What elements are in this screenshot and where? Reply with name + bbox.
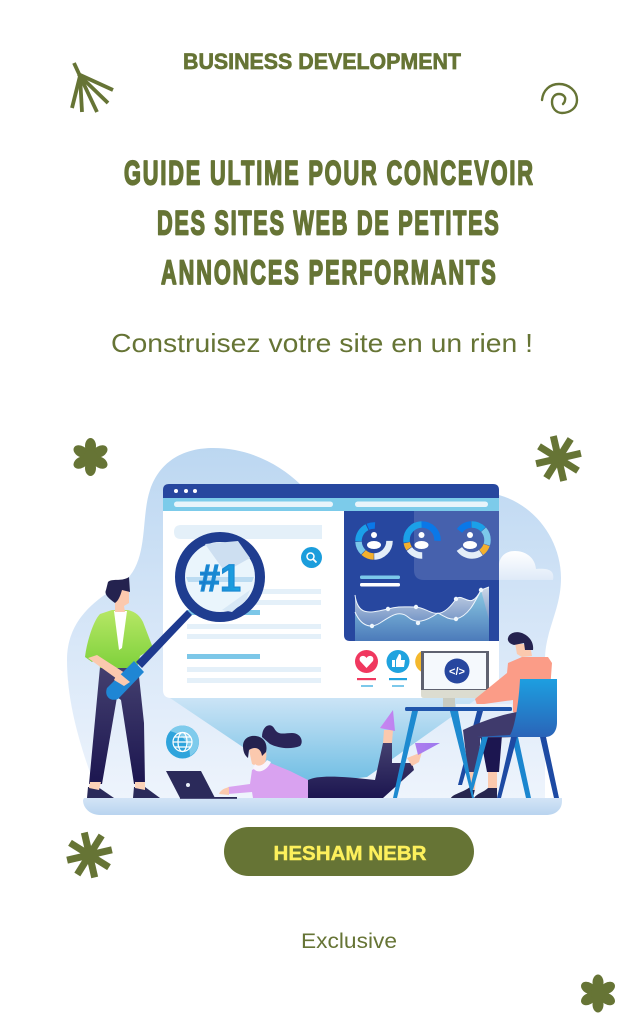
donut 2 (406, 524, 438, 556)
dashboard panel (344, 511, 499, 641)
man's hand (114, 672, 130, 686)
icon: globe (166, 725, 199, 758)
chair and desk legs (393, 711, 559, 798)
seated man's hair (508, 632, 533, 650)
author pill (224, 827, 474, 876)
handle (136, 610, 192, 668)
donut 3 (456, 524, 488, 556)
donut charts (358, 524, 488, 556)
man's shirt (85, 610, 153, 668)
seated man's torso (475, 657, 552, 722)
woman's feet (383, 730, 422, 766)
chart legend lines (360, 576, 400, 579)
background blob (67, 448, 561, 800)
man's arm (88, 655, 128, 684)
far desk legs (458, 711, 483, 785)
window header (163, 484, 499, 498)
man's head (115, 590, 129, 612)
area chart (355, 587, 489, 641)
icon: palm leaf (72, 63, 113, 112)
window body (163, 484, 499, 698)
cloud (499, 551, 553, 580)
title line 2: DES SITES WEB DE PETITES (157, 205, 499, 243)
icon: asterisk top right (536, 436, 581, 481)
monitor (421, 651, 489, 707)
man with magnifier (85, 537, 260, 798)
light beam under window (170, 698, 478, 785)
man's collar (114, 611, 127, 650)
title line 1: GUIDE ULTIME POUR CONCEVOIR (124, 155, 533, 193)
ground (83, 798, 562, 815)
ponytail (262, 725, 302, 748)
browser window (163, 484, 499, 698)
woman's sweater (228, 762, 308, 798)
man's legs (89, 667, 145, 784)
icon: yellow reaction (415, 651, 422, 672)
rank text: #1 (199, 558, 241, 600)
woman's hair (243, 736, 267, 758)
icon: flower top left (71, 438, 110, 476)
seated man's back leg (480, 735, 502, 772)
lens (180, 537, 260, 617)
icon: search button (301, 547, 322, 568)
seated man's front leg (463, 712, 517, 772)
icon: spiral (542, 84, 577, 113)
chair (477, 679, 557, 737)
icon: heart reaction (355, 650, 378, 687)
desk top (405, 707, 512, 711)
man's hair (105, 577, 130, 603)
laptop (166, 771, 215, 798)
left content lines (174, 525, 322, 683)
seated man's shoes (451, 787, 497, 798)
man's shoes (87, 787, 160, 798)
title line 3: ANNONCES PERFORMANTS (161, 254, 496, 292)
woman's head (248, 745, 266, 768)
icon: thumbs-up reaction (386, 650, 410, 687)
woman's legs (308, 743, 414, 798)
author name: HESHAM NEBR (274, 843, 427, 865)
footer label: Exclusive (301, 930, 397, 953)
seated man's head (515, 643, 532, 657)
top label: business development: BUSINESS DEVELOPMENT (183, 49, 461, 74)
code symbol: </> (449, 666, 465, 678)
title (124, 155, 533, 292)
window dots (174, 489, 197, 493)
illustration (67, 448, 562, 815)
magnifier (106, 537, 260, 700)
woman on laptop (166, 710, 440, 799)
subtitle: Construisez votre site en un rien ! (111, 328, 533, 358)
woman's hand (219, 787, 229, 795)
desk and man at computer (393, 632, 559, 798)
icon: flower bottom right (579, 974, 617, 1012)
donut 1 (358, 526, 390, 556)
icon: asterisk bottom left (67, 833, 112, 877)
address bar (163, 498, 499, 511)
